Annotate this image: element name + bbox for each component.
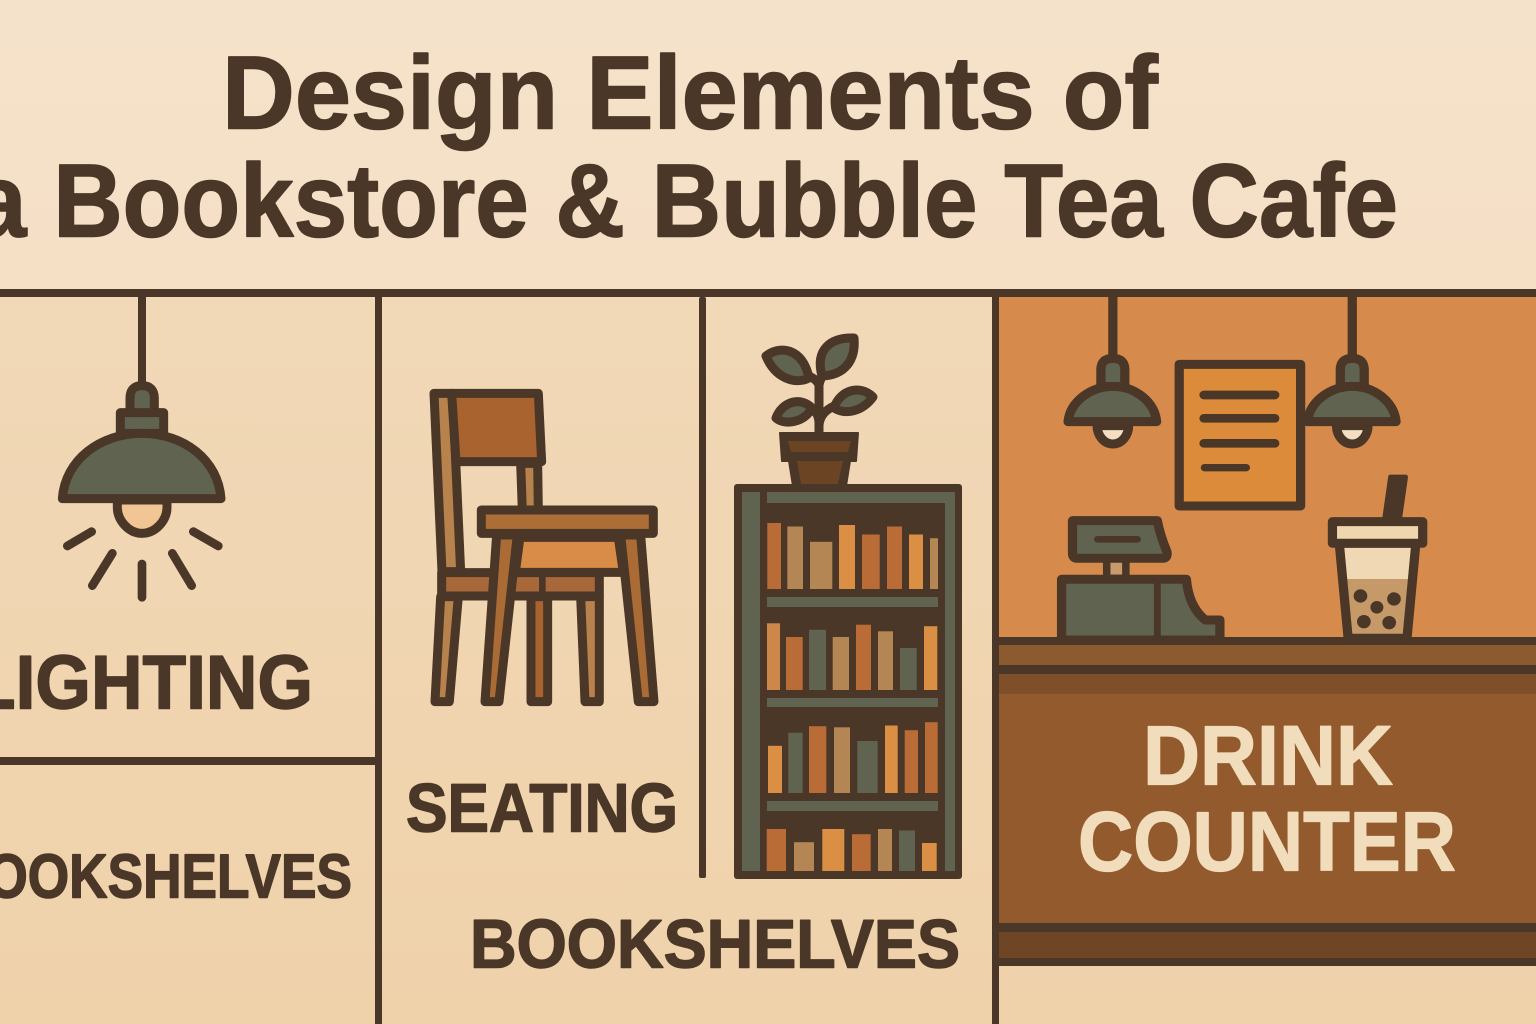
shelf frame	[742, 492, 955, 871]
icon: chair and table	[434, 393, 654, 702]
icon: counter items	[1062, 295, 1423, 640]
books row 4	[767, 829, 937, 871]
icon: bookshelf	[734, 484, 962, 879]
panel: drink counter: COUNTER	[1078, 794, 1456, 888]
stem	[809, 375, 834, 433]
chair support	[521, 463, 538, 510]
counter label: DRINK	[1143, 708, 1393, 802]
chair legs	[435, 597, 458, 702]
panel: drink counter	[999, 297, 1536, 966]
books row 1	[767, 523, 938, 589]
table top	[481, 510, 653, 533]
light rays	[67, 532, 218, 597]
title	[0, 36, 1398, 260]
icon: menu board	[1179, 364, 1301, 506]
counter top	[999, 637, 1536, 645]
label: bookshelves: BOOKSHELVES	[470, 906, 960, 982]
pot	[780, 433, 858, 486]
books row 2	[767, 623, 937, 690]
chair seat rail	[442, 573, 599, 596]
chair upright	[434, 393, 461, 572]
frame lines	[0, 289, 1536, 1024]
wall	[999, 297, 1536, 638]
icon: cash register	[1062, 521, 1220, 640]
header background	[0, 0, 1536, 290]
icon: pendant lamp right	[1307, 295, 1396, 444]
icon: pendant lamp	[62, 297, 221, 597]
books row 3	[768, 722, 938, 793]
chair seat	[515, 537, 623, 572]
label: seating: SEATING	[406, 770, 678, 846]
icon: pendant lamp left	[1068, 295, 1157, 444]
icon: bubble tea cup	[1332, 477, 1423, 638]
panels background	[0, 290, 1536, 1024]
title: Design Elements of	[222, 36, 1158, 152]
counter front	[999, 674, 1536, 694]
table legs	[485, 535, 517, 702]
title: a Bookstore & Bubble Tea Cafe	[0, 144, 1398, 260]
icon: potted plant	[766, 338, 873, 486]
leaves	[766, 350, 809, 381]
chair back	[452, 393, 542, 462]
